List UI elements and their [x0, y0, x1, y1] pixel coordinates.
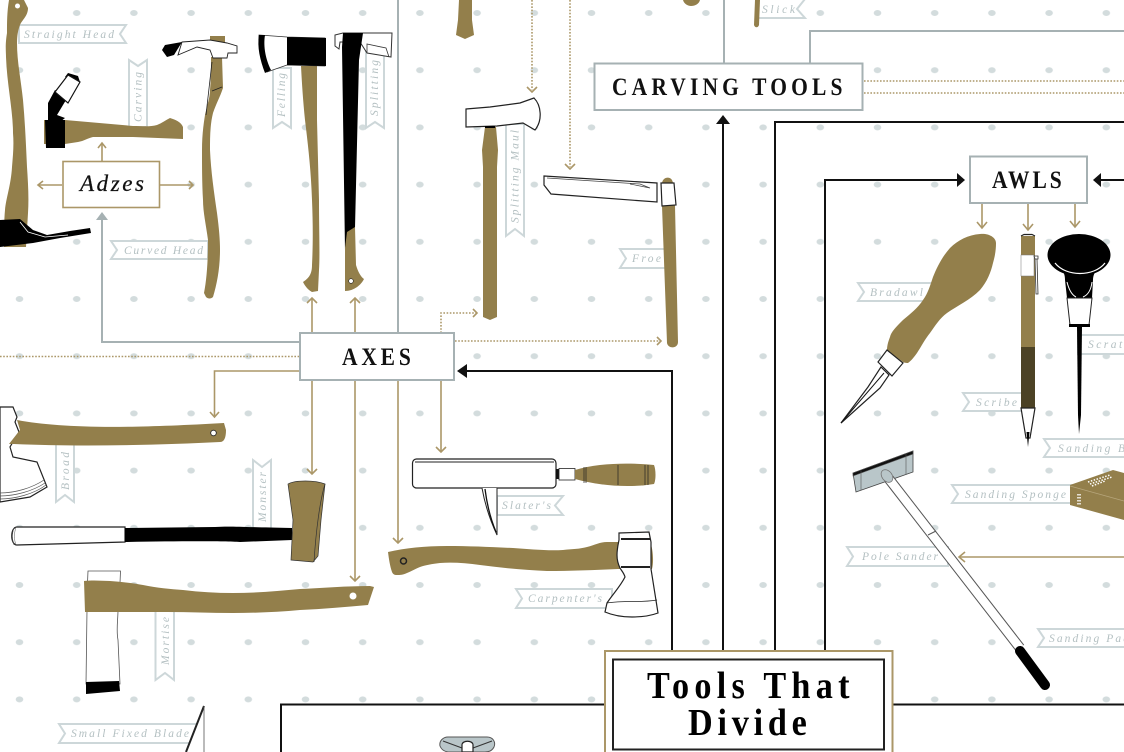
heading: Awls: [970, 156, 1087, 203]
heading: AXES: [300, 333, 454, 380]
tool: sanding sponge: [1070, 470, 1124, 520]
tool: slater's hatchet: [412, 459, 656, 535]
tool: splitting maul: [466, 98, 540, 320]
tool: felling axe: [258, 35, 326, 292]
ribbon: Carving: [129, 60, 147, 127]
solid gold connectors from AXES: [210, 298, 446, 581]
tool: straight head adze: [0, 0, 91, 247]
ribbon: Splitting: Splitting: [369, 60, 381, 116]
ribbon: Small Fixed Blade: Small Fixed Blade: [71, 728, 189, 740]
ribbon: Sanding Block: [1044, 439, 1124, 457]
ribbon: Felling: [273, 68, 291, 128]
tool: curved head axe: [162, 36, 237, 298]
tool: mortise axe: [84, 571, 374, 694]
black hierarchy lines: [281, 115, 1124, 752]
ribbon: Slater's: Slater's: [502, 500, 552, 512]
ribbon: Curved Head: [111, 241, 208, 259]
ribbon: Monster: [253, 460, 271, 530]
ribbon: Sanding Sponge: Sanding Sponge: [965, 489, 1066, 501]
ribbon: Bradawl: Bradawl: [870, 287, 923, 299]
dotted gold connectors: [0, 0, 1124, 356]
tool: monster maul: [12, 481, 325, 562]
ribbon: Straight Head: Straight Head: [24, 29, 114, 41]
ribbon: Scribe: Scribe: [976, 397, 1017, 409]
heading: Carving Tools: [594, 64, 862, 110]
ribbon: Felling: Felling: [276, 73, 288, 118]
ribbon: Splitting Maul: Splitting Maul: [510, 130, 522, 223]
ribbon: Carving: Carving: [132, 72, 144, 122]
ribbon: Mortise: [156, 610, 174, 680]
tool: partial tool at bottom: [440, 737, 495, 752]
heading: Adzes: [63, 162, 160, 208]
heading: Awls: AWLS: [992, 167, 1062, 194]
ribbon: Slick: Slick: [762, 4, 796, 16]
ribbon: Small Fixed Blade: [59, 724, 198, 743]
ribbon: Mortise: Mortise: [160, 617, 172, 666]
tool: bradawl: [841, 234, 996, 423]
title block: Tools That Divide: Divide: [688, 701, 807, 743]
ribbon: Curved Head: Curved Head: [124, 245, 203, 257]
heading: Adzes: Adzes: [78, 171, 144, 196]
ribbon: Straight Head: [19, 25, 126, 43]
solid gold connectors from AWLS and pole sander: [959, 204, 1124, 562]
ribbon: Broad: Broad: [60, 452, 72, 490]
tool: small fixed blade (partial): [186, 706, 204, 752]
tool: carpenter's axe: [388, 532, 658, 617]
arrows around Adzes: [38, 143, 193, 189]
ribbon: Sanding Sponge: [952, 485, 1072, 503]
heading: Carving Tools: CARVING TOOLS: [612, 74, 842, 101]
ribbon: Froe: [620, 249, 668, 268]
ribbon: Sanding Pad: [1038, 629, 1124, 647]
tool: splitting axe: [335, 33, 392, 291]
title block: Tools That Divide: [605, 651, 892, 752]
tool: pole sander: [853, 451, 1045, 685]
ribbon: Bradawl: [858, 283, 932, 301]
ribbon: Monster: Monster: [257, 471, 269, 523]
title block: Tools That Divide: Tools That: [647, 664, 850, 706]
ribbon: Froe: Froe: [631, 253, 661, 265]
ribbon: Pole Sander: Pole Sander: [861, 551, 939, 563]
ribbon: Slick: [757, 0, 805, 18]
grey connector lines: [96, 0, 1124, 342]
tool: scribe: [1021, 234, 1038, 447]
ribbon: Broad: [56, 444, 74, 502]
tool: broad axe: [0, 407, 226, 502]
ribbon: Scratch: [1078, 335, 1124, 354]
tool: froe: [544, 176, 678, 347]
ribbon: Carpenter's: Carpenter's: [528, 593, 603, 605]
ribbon: Carpenter's: [516, 589, 612, 608]
ribbon: Splitting: [366, 52, 384, 128]
heading: AXES: AXES: [342, 344, 411, 371]
ribbon: Slater's: [497, 496, 563, 515]
tool: scratch awl: [1048, 234, 1110, 434]
ribbon: Pole Sander: [847, 547, 948, 566]
ribbon: Splitting Maul: [506, 124, 524, 236]
ribbon: Scribe: [963, 393, 1024, 411]
tool: handle stub at top: [456, 0, 760, 39]
tool: carving adze: [44, 73, 183, 148]
